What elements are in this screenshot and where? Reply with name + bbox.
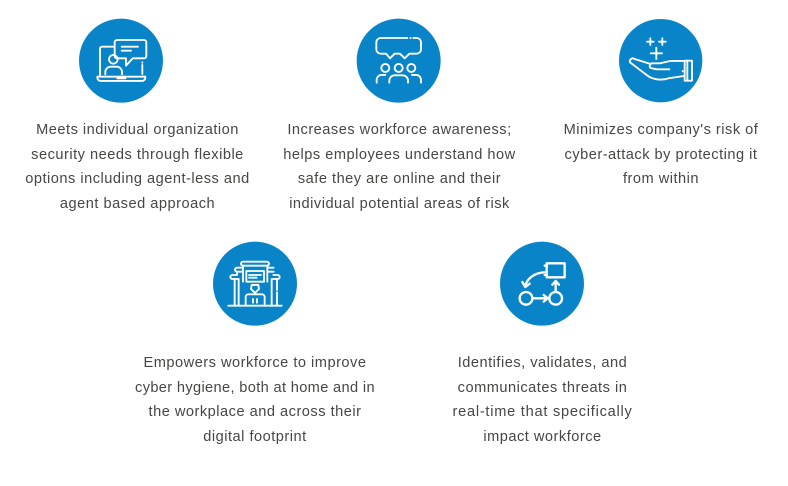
text: workforce awareness: Increases workforce awareness; bbox=[287, 122, 512, 138]
text: flexible options: options including agent-less and bbox=[25, 171, 250, 187]
text: threats: communicates threats in bbox=[458, 380, 627, 396]
icon: laptop with chat bubble bbox=[79, 19, 163, 103]
text: threats bbox=[452, 355, 633, 444]
text: workforce awareness bbox=[283, 122, 516, 212]
text: flexible options bbox=[25, 122, 250, 212]
text: minimizes risk bbox=[564, 122, 758, 187]
text: workforce awareness: helps employees understand how bbox=[283, 146, 516, 162]
text: workforce awareness: individual potential areas of risk bbox=[289, 196, 510, 212]
text: minimizes risk: from within bbox=[623, 171, 699, 187]
text: threats: impact workforce bbox=[483, 428, 602, 444]
text: cyber hygiene: cyber hygiene, both at home and in bbox=[135, 380, 375, 396]
icon: open hand with plus signs bbox=[619, 19, 702, 102]
icon: group with speech bubble bbox=[357, 19, 441, 103]
text: flexible options: security needs through flexible bbox=[31, 146, 244, 162]
text: cyber hygiene: the workplace and across their bbox=[149, 404, 361, 420]
text: workforce awareness: safe they are online and their bbox=[298, 171, 501, 187]
text: threats: Identifies, validates, and bbox=[458, 355, 627, 371]
text: flexible options: agent based approach bbox=[60, 196, 215, 212]
text: flexible options: Meets individual organization bbox=[36, 122, 239, 138]
text: cyber hygiene: digital footprint bbox=[203, 428, 307, 444]
icon: workflow of circles and square bbox=[500, 242, 584, 326]
text: cyber hygiene: Empowers workforce to improve bbox=[144, 355, 366, 371]
text: minimizes risk: cyber-attack by protecting it bbox=[565, 146, 757, 162]
icon: building with security guard bbox=[213, 242, 297, 326]
text: cyber hygiene bbox=[135, 355, 375, 444]
text: threats: real-time that specifically bbox=[452, 404, 633, 420]
text: minimizes risk: Minimizes company's risk of bbox=[564, 122, 758, 138]
